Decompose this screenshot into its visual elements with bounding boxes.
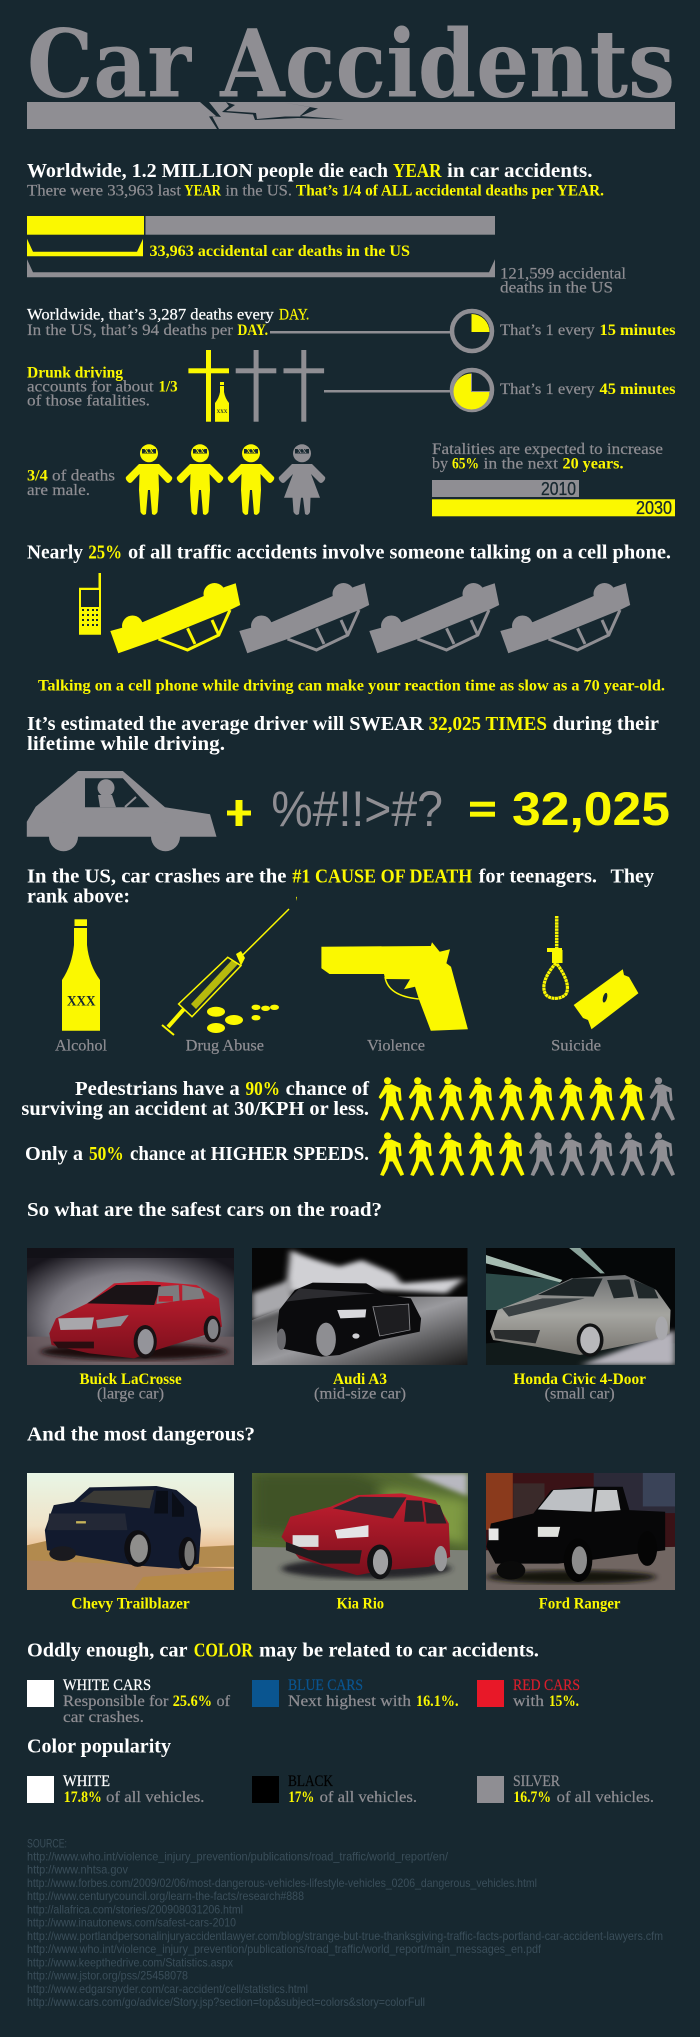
text: deaths per day: DAY. (279, 306, 309, 323)
text: fatalities forecast: by (432, 455, 448, 472)
text: male deaths: 3/4 (27, 468, 48, 485)
label: Kia Rio: Kia Rio (337, 1596, 384, 1613)
equals sign (470, 802, 495, 817)
text: drunk driving: of those fatalities. (27, 393, 150, 410)
connector line (324, 390, 451, 392)
text: white cars: WHITE CARS (63, 1677, 151, 1694)
source list: SOURCE: (27, 1836, 67, 1850)
bar: 2030 (432, 498, 675, 518)
icon: female figure (279, 444, 325, 515)
heading: cell phones: 25% (88, 541, 122, 563)
text: black (288, 1773, 417, 1806)
heading: color popularity: Color popularity (27, 1736, 171, 1758)
source list: http://www.cars.com/go/advice/Story.jsp?section=top&subject=colors&story=colorFull (27, 1995, 425, 2009)
photo: Honda Civic (486, 1248, 675, 1365)
icon: overturned car gray 3 (500, 583, 630, 653)
icon: alcohol bottle (62, 919, 100, 1031)
icon: crosses and bottle (188, 350, 324, 422)
callout: reaction time: Talking on a cell phone while driving can make your reaction time as slow as a 70 year-old. (38, 678, 665, 695)
text: fatalities forecast: 65% (452, 455, 479, 472)
source list: http://www.inautonews.com/safest-cars-2010 (27, 1916, 236, 1930)
label: accidental deaths: deaths in the US (500, 279, 613, 296)
text: fatalities forecast: in the next (484, 455, 559, 472)
text: pedestrians at low speed: Pedestrians have a (75, 1078, 240, 1100)
label: Audi A3: (mid-size car) (314, 1385, 406, 1402)
icon: overturned car yellow (110, 583, 240, 653)
text: red cars: with (513, 1693, 544, 1710)
heading: safest cars: So what are the safest cars on the road? (27, 1199, 382, 1221)
cracked road bar (27, 102, 675, 129)
plus sign (227, 800, 251, 826)
big number: 32,025 (512, 782, 670, 835)
text: black: BLACK (288, 1773, 334, 1790)
label: violence: Violence (367, 1038, 425, 1055)
subhead: US deaths (27, 182, 604, 199)
bar: 2010 (432, 479, 579, 499)
icon: male figure 2: XX (195, 448, 205, 455)
text: deaths per day: In the US, that’s 94 deaths per (27, 322, 234, 339)
label: Audi A3 (314, 1371, 406, 1402)
text: white cars: of (216, 1693, 231, 1710)
icon: male figure 3 (228, 444, 274, 515)
label: Ford Ranger: Ford Ranger (539, 1596, 621, 1613)
text: white (63, 1773, 204, 1806)
source list (27, 1836, 663, 2009)
label: Buick LaCrosse: Buick LaCrosse (80, 1371, 182, 1388)
heading: car color: COLOR (194, 1640, 253, 1662)
text: fatalities forecast (432, 441, 663, 472)
source list: http://www.centurycouncil.org/learn-the-facts/research#888 (27, 1889, 304, 1903)
text: deaths per day: DAY. (238, 322, 268, 339)
swatch: blue cars (252, 1680, 279, 1707)
heading: teenagers: They (610, 866, 654, 888)
source list: http://www.keepthedrive.com/Statistics.aspx (27, 1955, 233, 1969)
icon: car with driver (27, 771, 216, 851)
text: deaths per day: Worldwide, that’s 3,287 deaths every (27, 306, 274, 323)
icon row: walkers 90 percent (379, 1077, 675, 1121)
text: pedestrians at high speed: 50% (89, 1143, 124, 1165)
text: 1 every 45 minutes (500, 381, 676, 398)
icon row: walkers 50 percent (379, 1132, 675, 1176)
text: white: WHITE (63, 1773, 110, 1790)
label: alcohol: Alcohol (55, 1038, 107, 1055)
bracket: accidental deaths (27, 259, 495, 277)
text: black: 17% (288, 1789, 314, 1806)
heading: car color: may be related to car accidents. (259, 1640, 539, 1662)
label: car deaths: 33,963 accidental car deaths in the US (150, 243, 410, 260)
heading: car color: Oddly enough, car (27, 1640, 188, 1662)
text: pedestrians at low speed: chance of (286, 1078, 369, 1100)
headline: worldwide deaths: in car accidents. (447, 160, 592, 182)
text: black: of all vehicles. (320, 1789, 417, 1806)
text: silver: of all vehicles. (557, 1789, 654, 1806)
text: fatalities forecast: Fatalities are expected to increase (432, 441, 663, 458)
label: accidental deaths (500, 265, 626, 296)
headline: worldwide deaths: Worldwide, 1.2 MILLION people die each (27, 160, 388, 182)
source list: http://www.jstor.org/pss/25458078 (27, 1969, 188, 1983)
heading: teenagers: In the US, car crashes are the (27, 866, 287, 888)
text: male deaths: of deaths (52, 468, 115, 485)
label: suicide: Suicide (551, 1038, 601, 1055)
text: drunk driving: 1/3 (158, 379, 178, 396)
text: blue cars: Next highest with (288, 1693, 411, 1710)
text: white cars: car crashes. (63, 1709, 144, 1726)
heading: cell phones: of all traffic accidents involve someone talking on a cell phone. (128, 541, 671, 563)
subhead: US deaths: There were 33,963 last (27, 182, 182, 199)
photo: Buick LaCrosse (27, 1248, 234, 1365)
icon: alcohol bottle: XXX (67, 994, 96, 1010)
heading: teenagers: #1 CAUSE OF DEATH (292, 866, 473, 888)
photo: Ford Ranger (486, 1473, 675, 1590)
text: silver (513, 1773, 654, 1806)
text: blue cars: BLUE CARS (288, 1677, 363, 1694)
text: 1 every 45 minutes: That’s 1 every (500, 381, 595, 398)
text: white cars: Responsible for (63, 1693, 169, 1710)
icon: clock 15 minutes (452, 311, 492, 351)
text: drunk driving: Drunk driving (27, 364, 123, 381)
text: pedestrians at low speed: 90% (246, 1078, 280, 1100)
text: drunk driving: accounts for about (27, 379, 154, 396)
text: 1 every 15 minutes: 15 minutes (600, 322, 676, 339)
icon: noose and razor blade (544, 916, 638, 1029)
heading: swearing: during their (553, 713, 659, 735)
source list: http://allafrica.com/stories/200908031206.html (27, 1902, 243, 1916)
text: blue cars (288, 1677, 459, 1710)
label: Buick LaCrosse: (large car) (97, 1385, 164, 1402)
swatch: black (252, 1776, 279, 1803)
icon: male figure 2 (177, 444, 223, 515)
heading: teenagers (27, 866, 654, 908)
photo: Chevy Trailblazer (27, 1473, 234, 1590)
subhead: US deaths: That’s 1/4 of ALL accidental deaths per YEAR. (296, 182, 604, 199)
icon: overturned car gray 2 (369, 583, 499, 653)
photo: Audi A3 (252, 1248, 468, 1365)
text: white: of all vehicles. (106, 1789, 204, 1806)
heading: teenagers: for teenagers. (479, 866, 597, 888)
icon: male figure 1: XX (144, 448, 154, 455)
label: Chevy Trailblazer: Chevy Trailblazer (71, 1596, 190, 1613)
swatch: white (27, 1776, 54, 1803)
connector line (270, 331, 452, 334)
heading: cell phones: Nearly (27, 541, 83, 563)
text: pedestrians at high speed: chance at HIGHER SPEEDS. (130, 1143, 369, 1165)
label: Audi A3: Audi A3 (333, 1371, 387, 1388)
icon: male figure 3: XX (246, 448, 256, 455)
text: pedestrians at high speed (25, 1143, 369, 1165)
text: pedestrians at low speed (21, 1078, 369, 1120)
text: male deaths (27, 468, 115, 499)
icon: clock 45 minutes (452, 370, 492, 410)
text: 1 every 15 minutes: That’s 1 every (500, 322, 595, 339)
source list: http://www.forbes.com/2009/02/06/most-dangerous-vehicles-lifestyle-vehicles_0206_dangerous_vehicles.html (27, 1876, 537, 1890)
text: red cars (513, 1677, 580, 1710)
label: drug abuse: Drug Abuse (186, 1038, 264, 1055)
label: Honda Civic (513, 1371, 646, 1402)
icon: crosses and bottle: XXX (217, 410, 228, 415)
heading: swearing: lifetime while driving. (27, 733, 225, 755)
heading: swearing (27, 713, 659, 755)
source list: http://www.edgarsnyder.com/car-accident/cell/statistics.html (27, 1982, 308, 1996)
text: fatalities forecast: 20 years. (562, 455, 624, 472)
label: Buick LaCrosse (80, 1371, 182, 1402)
text: 1 every 15 minutes (500, 322, 676, 339)
label: Honda Civic: Honda Civic 4-Door (513, 1371, 646, 1388)
subhead: US deaths: YEAR (184, 182, 222, 199)
icon: male figure 1 (126, 444, 172, 515)
source list: http://www.who.int/violence_injury_prevention/publications/road_traffic/world_report/en/ (27, 1850, 449, 1864)
label: accidental deaths: 121,599 accidental (500, 265, 626, 282)
text: red cars: RED CARS (513, 1677, 580, 1694)
text: pedestrians at high speed: Only a (25, 1143, 83, 1165)
source list: http://www.nhtsa.gov (27, 1863, 128, 1877)
source list: http://www.who.int/violence_injury_prevention/publications/road_traffic/world_report/main_messages_en.pdf (27, 1942, 542, 1956)
headline: worldwide deaths: YEAR (393, 160, 442, 182)
text: silver: 16.7% (513, 1789, 551, 1806)
heading: most dangerous: And the most dangerous? (27, 1424, 255, 1446)
text: white: 17.8% (64, 1789, 102, 1806)
text: deaths per day (27, 306, 309, 339)
photo: Kia Rio (252, 1473, 468, 1590)
headline: worldwide deaths (27, 160, 592, 182)
text: white cars: 25.6% (173, 1693, 212, 1710)
bracket: car deaths (27, 239, 143, 256)
text: white cars (63, 1677, 231, 1726)
heading: teenagers: rank above: (27, 886, 130, 908)
bar chart: share of accidental deaths (27, 216, 495, 235)
text: silver: SILVER (513, 1773, 561, 1790)
swear symbols: %#!!>#? (271, 781, 443, 837)
text: red cars: 15%. (549, 1693, 579, 1710)
text: drunk driving (27, 364, 178, 410)
bar: 2010: 2010 (541, 479, 576, 499)
heading: car color (27, 1640, 539, 1662)
label: Honda Civic: (small car) (545, 1385, 615, 1402)
subhead: US deaths: in the US. (225, 182, 292, 199)
icon: syringe and pills (162, 897, 297, 1035)
text: blue cars: 16.1%. (416, 1693, 459, 1710)
bar: 2030: 2030 (636, 498, 672, 518)
icon: cell phone (79, 573, 101, 635)
heading: swearing: 32,025 TIMES (429, 713, 547, 735)
icon: handgun (321, 942, 468, 1031)
swatch: white cars (27, 1680, 54, 1707)
heading: swearing: It’s estimated the average driver will SWEAR (27, 713, 424, 735)
swatch: silver (477, 1776, 504, 1803)
text: pedestrians at low speed: surviving an accident at 30/KPH or less. (21, 1098, 369, 1120)
icon: female figure: XX (297, 448, 307, 455)
text: male deaths: are male. (27, 482, 90, 499)
swatch: red cars (477, 1680, 504, 1707)
icon: overturned car gray 1 (239, 583, 369, 653)
text: 1 every 45 minutes: 45 minutes (600, 381, 676, 398)
